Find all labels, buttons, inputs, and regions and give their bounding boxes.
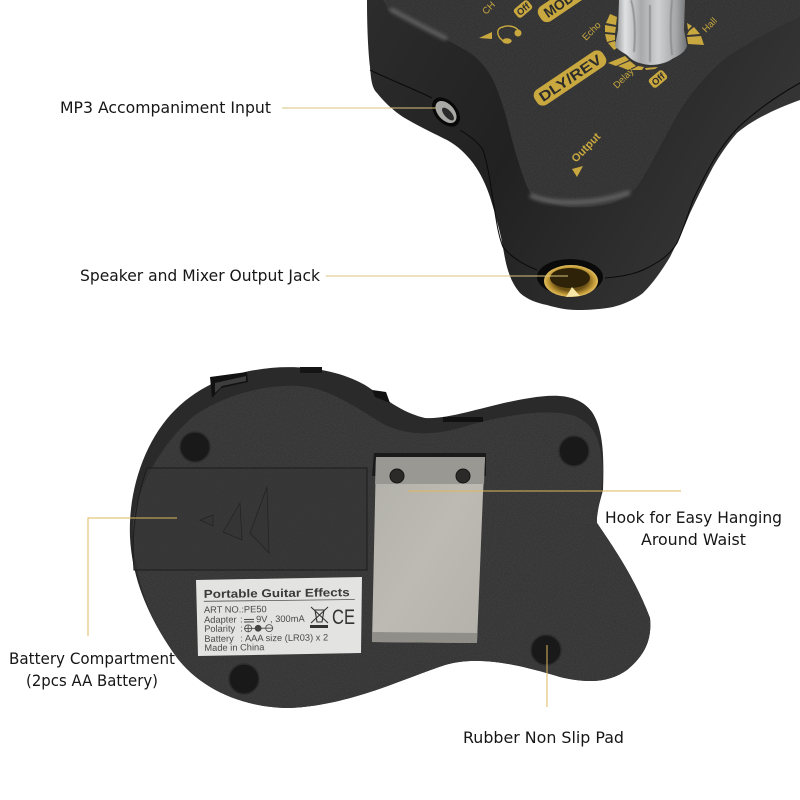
label spec lines: Made in China bbox=[204, 642, 265, 653]
label: Speaker and Mixer Output Jack: Speaker and Mixer Output Jack bbox=[80, 266, 321, 285]
leader line: rubber pad bbox=[546, 645, 548, 707]
mini jack MP3 input bbox=[426, 92, 466, 132]
hook screw left bbox=[390, 469, 404, 483]
label: Battery Compartment: (2pcs AA Battery) bbox=[26, 671, 158, 690]
label: Hook for Easy Hanging Around Waist: Hook for Easy Hanging bbox=[605, 508, 782, 527]
top face texture bbox=[383, 0, 800, 207]
label spec lines: : bbox=[240, 623, 243, 633]
label: Rubber Non Slip Pad: Rubber Non Slip Pad bbox=[463, 728, 624, 747]
Off badge lower: Off bbox=[650, 71, 668, 88]
label: Battery Compartment: Battery Compartment bbox=[9, 649, 175, 668]
Output label: Output bbox=[570, 131, 603, 165]
label spec lines: Adapter bbox=[204, 615, 237, 625]
headphone arrow bbox=[479, 32, 492, 39]
edge highlights bbox=[392, 10, 628, 202]
label title: Portable Guitar Effects bbox=[204, 587, 350, 601]
Delay label: Delay bbox=[611, 66, 636, 91]
label spec lines: 9V , 300mA bbox=[256, 614, 305, 624]
label: Hook for Easy Hanging Around Waist bbox=[605, 508, 782, 549]
label spec lines: : AAA size (LR03) x 2 bbox=[240, 632, 328, 643]
panel text labels bbox=[479, 0, 720, 177]
back face texture bbox=[133, 386, 650, 708]
silver knob bbox=[615, 0, 687, 65]
leader line: hook bbox=[408, 490, 681, 492]
dial segments bbox=[605, 14, 704, 70]
Hall label: Hall bbox=[700, 16, 720, 35]
label: MP3 Accompaniment Input: MP3 Accompaniment Input bbox=[60, 98, 271, 117]
DC symbol bbox=[244, 619, 254, 622]
polarity symbol bbox=[244, 625, 273, 632]
seam line bbox=[370, 70, 800, 278]
leader line: MP3 input bbox=[282, 107, 436, 109]
label rule bbox=[204, 599, 355, 602]
photo: top of guitar effects pedal bbox=[367, 0, 800, 310]
DLY/REV badge bbox=[531, 48, 609, 108]
top switches and notches bbox=[210, 367, 483, 422]
output arrow bbox=[572, 166, 583, 177]
label spec lines: Polarity bbox=[204, 624, 236, 634]
CE mark: CE bbox=[332, 606, 355, 629]
battery compartment cover bbox=[133, 468, 367, 570]
metal belt hook bbox=[372, 453, 486, 643]
label spec lines: Battery bbox=[204, 634, 234, 644]
rubber pads bbox=[180, 432, 589, 694]
MODE badge bbox=[535, 0, 595, 25]
back face bbox=[133, 386, 650, 708]
leader line: output jack bbox=[326, 275, 568, 277]
headphone icon bbox=[498, 26, 521, 43]
pedal side body bbox=[367, 0, 800, 310]
DLY/REV badge: DLY/REV bbox=[536, 51, 605, 105]
Off badge lower bbox=[648, 69, 669, 90]
CH label: CH bbox=[480, 0, 498, 17]
product label bbox=[196, 577, 362, 656]
photo: back of guitar effects pedal bbox=[130, 367, 650, 708]
leader line: battery compartment bbox=[88, 518, 177, 636]
Off badge upper: Off bbox=[515, 1, 533, 18]
gold output jack bbox=[537, 259, 603, 297]
direction arrows embossed bbox=[200, 487, 269, 553]
pedal top face bbox=[383, 0, 800, 207]
label: Battery Compartment bbox=[9, 649, 175, 690]
Echo label: Echo bbox=[580, 20, 603, 43]
label spec lines: : bbox=[240, 614, 243, 624]
label: Hook for Easy Hanging Around Waist: Around Waist bbox=[641, 530, 746, 549]
hook screw right bbox=[456, 469, 470, 483]
label spec lines: ART NO.:PE50 bbox=[204, 604, 267, 615]
back body silhouette bbox=[130, 367, 650, 708]
WEEE icon bbox=[310, 607, 328, 628]
